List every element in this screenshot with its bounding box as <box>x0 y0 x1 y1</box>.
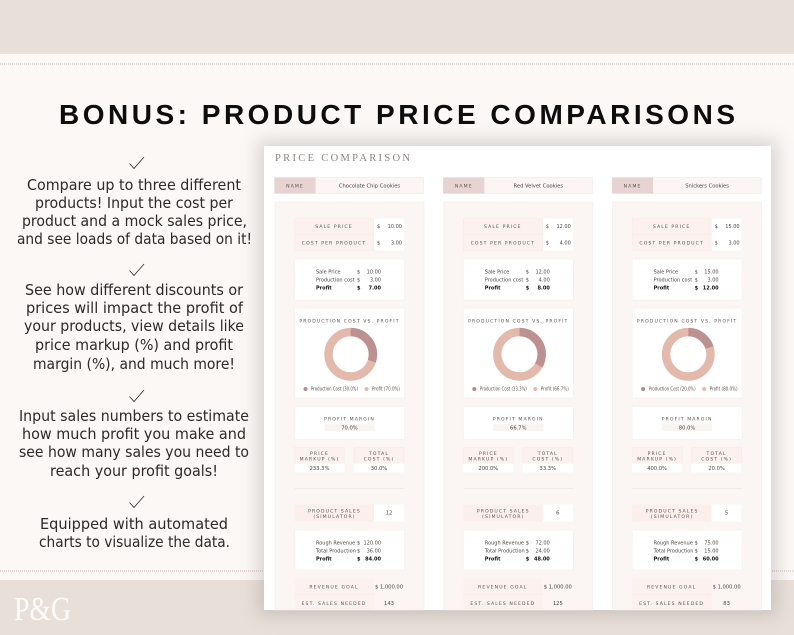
revenue goal: REVENUE GOAL <box>478 584 527 590</box>
column: Red Velvet Cookies <box>443 178 593 610</box>
revenue goal: $ 1,000.00 <box>375 584 403 590</box>
profit summary <box>294 259 404 300</box>
profit summary: $ <box>357 270 360 276</box>
icon: check 3 <box>130 390 144 402</box>
inputs: sale price and cost: 10.00 <box>388 224 402 230</box>
profit summary <box>463 259 573 300</box>
revenue goal <box>463 578 573 610</box>
revenue goal <box>632 578 742 610</box>
revenue summary: Rough Revenue <box>485 540 524 546</box>
text: discounts: margin (%), and much more! <box>33 355 235 373</box>
text: compare products: product and a mock sales price, <box>22 212 247 230</box>
chart: production cost vs profit donut: PRODUCTION COST VS. PROFIT <box>299 318 400 324</box>
profit summary: Profit <box>654 286 670 292</box>
price markup: 400.0% <box>647 466 667 472</box>
inputs: sale price and cost: $ <box>715 240 718 246</box>
revenue summary: $ <box>526 540 529 546</box>
profit margin: PROFIT MARGIN <box>324 416 375 422</box>
revenue goal: 143 <box>384 601 394 607</box>
name bar: Red Velvet Cookies <box>514 184 563 190</box>
total cost: TOTAL <box>537 451 558 457</box>
text: compare products: products! Input the cost per <box>35 194 234 212</box>
text: discounts <box>24 281 244 373</box>
text: sales numbers: how much profit you make and <box>22 425 246 443</box>
column panel <box>444 202 593 610</box>
revenue summary: 72.00 <box>535 540 550 546</box>
inputs: sale price and cost: COST PER PRODUCT <box>471 240 535 246</box>
revenue summary: Total Production <box>315 548 356 554</box>
icon: check 1 <box>130 157 144 168</box>
inputs: sale price and cost: 4.00 <box>560 240 571 246</box>
profit summary: Sale Price <box>654 270 678 276</box>
profit summary: 8.00 <box>537 286 550 292</box>
sales simulator: PRODUCT SALES <box>477 508 530 514</box>
text: charts <box>39 515 230 551</box>
revenue goal: EST. SALES NEEDED <box>302 601 366 607</box>
revenue summary: Profit <box>654 556 670 562</box>
price markup <box>632 448 682 472</box>
inputs: sale price and cost: 3.00 <box>728 240 740 246</box>
total cost: COST (%) <box>701 456 732 462</box>
sales simulator: (SIMULATOR) <box>482 514 524 520</box>
sales simulator <box>294 504 404 522</box>
icon: check 4 <box>130 496 144 508</box>
chart: production cost vs profit donut: PRODUCTION COST VS. PROFIT <box>637 318 737 324</box>
revenue goal <box>294 578 404 610</box>
revenue summary: $ <box>357 556 361 562</box>
profit summary: 7.00 <box>369 286 382 292</box>
profit margin <box>632 406 742 440</box>
sales simulator <box>632 504 742 522</box>
sales simulator <box>463 504 573 522</box>
chart: production cost vs profit donut <box>632 308 742 398</box>
icon: check 2 <box>130 264 144 276</box>
sales simulator: 5 <box>725 510 728 516</box>
text: discounts: See how different discounts or <box>25 281 244 299</box>
profit summary: Profit <box>485 286 501 292</box>
revenue summary: $ <box>357 548 360 554</box>
inputs: sale price and cost: $ <box>715 224 718 230</box>
revenue summary: $ <box>357 540 360 546</box>
top band <box>0 0 794 54</box>
chart: production cost vs profit donut: Profit (80.0%) <box>710 386 738 392</box>
revenue summary: 75.00 <box>704 540 719 546</box>
chart: production cost vs profit donut: Production Cost (30.0%) <box>311 386 358 392</box>
bottom band <box>0 580 794 635</box>
profit summary: 12.00 <box>535 270 550 276</box>
profit summary: Sale Price <box>485 270 509 276</box>
name bar <box>443 178 592 194</box>
column panel <box>613 202 762 610</box>
revenue goal: REVENUE GOAL <box>309 584 359 590</box>
price markup: PRICE <box>479 451 498 457</box>
profit margin <box>294 406 404 440</box>
inputs: sale price and cost: $ <box>377 240 380 246</box>
profit margin <box>463 406 573 440</box>
price markup: 200.0% <box>478 466 498 472</box>
text: sales numbers: Input sales numbers to estimate <box>19 407 249 425</box>
total cost <box>523 448 573 472</box>
profit summary: $ <box>357 278 360 284</box>
revenue summary: 60.00 <box>703 556 719 562</box>
total cost: 33.3% <box>540 466 556 472</box>
revenue summary: $ <box>695 548 698 554</box>
profit summary: $ <box>695 270 698 276</box>
name bar: NAME <box>624 184 642 190</box>
chart: production cost vs profit donut <box>463 308 573 398</box>
total cost: TOTAL <box>368 451 389 457</box>
profit summary: 10.00 <box>367 270 381 276</box>
price markup: MARKUP (%) <box>468 456 508 462</box>
text: compare products <box>17 176 252 248</box>
price markup <box>294 448 344 472</box>
inputs: sale price and cost: 3.00 <box>391 240 402 246</box>
revenue summary: 120.00 <box>364 540 381 546</box>
profit summary: $ <box>526 286 530 292</box>
revenue summary: Total Production <box>653 548 693 554</box>
price markup <box>463 448 513 472</box>
profit summary: $ <box>526 278 529 284</box>
text: charts: Equipped with automated <box>40 515 228 533</box>
profit summary: $ <box>357 286 361 292</box>
inputs: sale price and cost: $ <box>546 224 549 230</box>
inputs: sale price and cost: SALE PRICE <box>484 224 522 230</box>
price markup: 233.3% <box>310 466 329 472</box>
profit summary: Sale Price <box>316 270 340 276</box>
revenue summary: $ <box>695 540 698 546</box>
revenue summary: Rough Revenue <box>316 540 355 546</box>
inputs: sale price and cost: SALE PRICE <box>315 224 353 230</box>
name bar: NAME <box>286 184 304 190</box>
revenue goal: 125 <box>553 601 563 607</box>
total cost: 30.0% <box>371 466 387 472</box>
profit summary: Profit <box>316 286 332 292</box>
sales simulator: PRODUCT SALES <box>308 508 361 514</box>
chart: production cost vs profit donut: Production Cost (33.3%) <box>480 386 527 392</box>
chart: production cost vs profit donut <box>294 308 404 398</box>
profit margin: 70.0% <box>341 426 358 432</box>
total cost: TOTAL <box>706 451 727 457</box>
revenue goal: 83 <box>723 601 730 607</box>
profit summary: $ <box>695 286 699 292</box>
text: discounts: prices will impact the profit of <box>26 299 244 317</box>
revenue summary: $ <box>526 548 529 554</box>
name bar: Snickers Cookies <box>685 184 729 190</box>
name bar: NAME <box>455 184 473 190</box>
revenue summary: Total Production <box>484 548 525 554</box>
profit summary: Production cost <box>654 278 692 284</box>
revenue summary: Profit <box>316 556 332 562</box>
text: discounts: price markup (%) and profit <box>35 336 233 354</box>
inputs: sale price and cost: 12.00 <box>556 224 571 230</box>
inputs: sale price and cost: COST PER PRODUCT <box>639 240 704 246</box>
text: sales numbers <box>19 407 249 480</box>
sheet heading: PRICE COMPARISON <box>275 153 410 164</box>
text: charts: charts to visualize the data. <box>39 533 230 551</box>
sales simulator: 12 <box>386 510 392 516</box>
profit margin: PROFIT MARGIN <box>662 416 712 422</box>
revenue goal: EST. SALES NEEDED <box>639 601 704 607</box>
profit summary: 12.00 <box>703 286 719 292</box>
revenue summary: 15.00 <box>704 548 719 554</box>
chart: production cost vs profit donut: Profit (70.0%) <box>372 386 400 392</box>
chart: production cost vs profit donut: PRODUCTION COST VS. PROFIT <box>468 318 568 324</box>
price markup: MARKUP (%) <box>637 456 677 462</box>
inputs: sale price and cost: 15.00 <box>725 224 740 230</box>
total cost <box>692 448 742 472</box>
inputs: sale price and cost: SALE PRICE <box>653 224 690 230</box>
chart: production cost vs profit donut: Production Cost (20.0%) <box>649 386 696 392</box>
inputs: sale price and cost <box>294 218 404 250</box>
title: BONUS: PRODUCT PRICE COMPARISONS <box>59 99 735 130</box>
total cost <box>354 448 404 472</box>
inputs: sale price and cost <box>632 218 742 250</box>
revenue summary: Rough Revenue <box>654 540 693 546</box>
price markup: MARKUP (%) <box>300 456 339 462</box>
name bar: Chocolate Chip Cookies <box>339 184 400 190</box>
inputs: sale price and cost: COST PER PRODUCT <box>302 240 366 246</box>
profit margin: PROFIT MARGIN <box>493 416 544 422</box>
revenue goal: $ 1,000.00 <box>713 584 741 590</box>
logo: P&G <box>14 591 71 628</box>
inputs: sale price and cost: $ <box>546 240 549 246</box>
price markup: PRICE <box>310 451 329 457</box>
profit summary: Production cost <box>316 278 355 284</box>
revenue goal: $ 1,000.00 <box>544 584 572 590</box>
profit summary: Production cost <box>485 278 523 284</box>
column: Chocolate Chip Cookies <box>274 178 424 610</box>
revenue summary: Profit <box>485 556 501 562</box>
profit summary <box>632 259 742 300</box>
revenue summary: 36.00 <box>367 548 381 554</box>
sales simulator: PRODUCT SALES <box>646 508 698 514</box>
inputs: sale price and cost: $ <box>377 224 380 230</box>
profit margin: 80.0% <box>679 426 695 432</box>
name bar <box>612 178 761 194</box>
revenue summary: 84.00 <box>365 556 382 562</box>
text: sales numbers: reach your profit goals! <box>50 462 218 480</box>
revenue summary <box>294 530 404 570</box>
revenue summary: $ <box>526 556 530 562</box>
feature list <box>17 157 252 551</box>
revenue goal: REVENUE GOAL <box>647 584 696 590</box>
sales simulator: 6 <box>556 510 559 516</box>
total cost: COST (%) <box>364 456 394 462</box>
text: compare products: Compare up to three different <box>27 176 241 194</box>
name bar <box>274 178 424 194</box>
total cost: 20.0% <box>708 466 725 472</box>
revenue summary <box>632 530 742 570</box>
chart: production cost vs profit donut: Profit (66.7%) <box>541 386 569 392</box>
revenue summary: 48.00 <box>534 556 550 562</box>
text: compare products: and see loads of data based on it! <box>17 230 252 248</box>
profit summary: $ <box>695 278 698 284</box>
profit summary: 3.00 <box>707 278 719 284</box>
sales simulator: (SIMULATOR) <box>313 514 356 520</box>
profit margin: 66.7% <box>510 426 527 432</box>
price markup: PRICE <box>648 451 667 457</box>
column panel <box>275 202 424 610</box>
text: sales numbers: see how many sales you need to <box>19 443 249 461</box>
revenue summary <box>463 530 573 570</box>
profit summary: 4.00 <box>539 278 550 284</box>
profit summary: $ <box>526 270 529 276</box>
revenue summary: $ <box>695 556 699 562</box>
spreadsheet sheet <box>264 146 771 610</box>
revenue summary: 24.00 <box>535 548 550 554</box>
profit summary: 15.00 <box>704 270 719 276</box>
text: discounts: your products, view details like <box>24 317 244 335</box>
inputs: sale price and cost <box>463 218 573 250</box>
total cost: COST (%) <box>532 456 563 462</box>
profit summary: 3.00 <box>370 278 381 284</box>
sales simulator: (SIMULATOR) <box>651 514 693 520</box>
revenue goal: EST. SALES NEEDED <box>470 601 535 607</box>
column: Snickers Cookies <box>612 178 762 610</box>
